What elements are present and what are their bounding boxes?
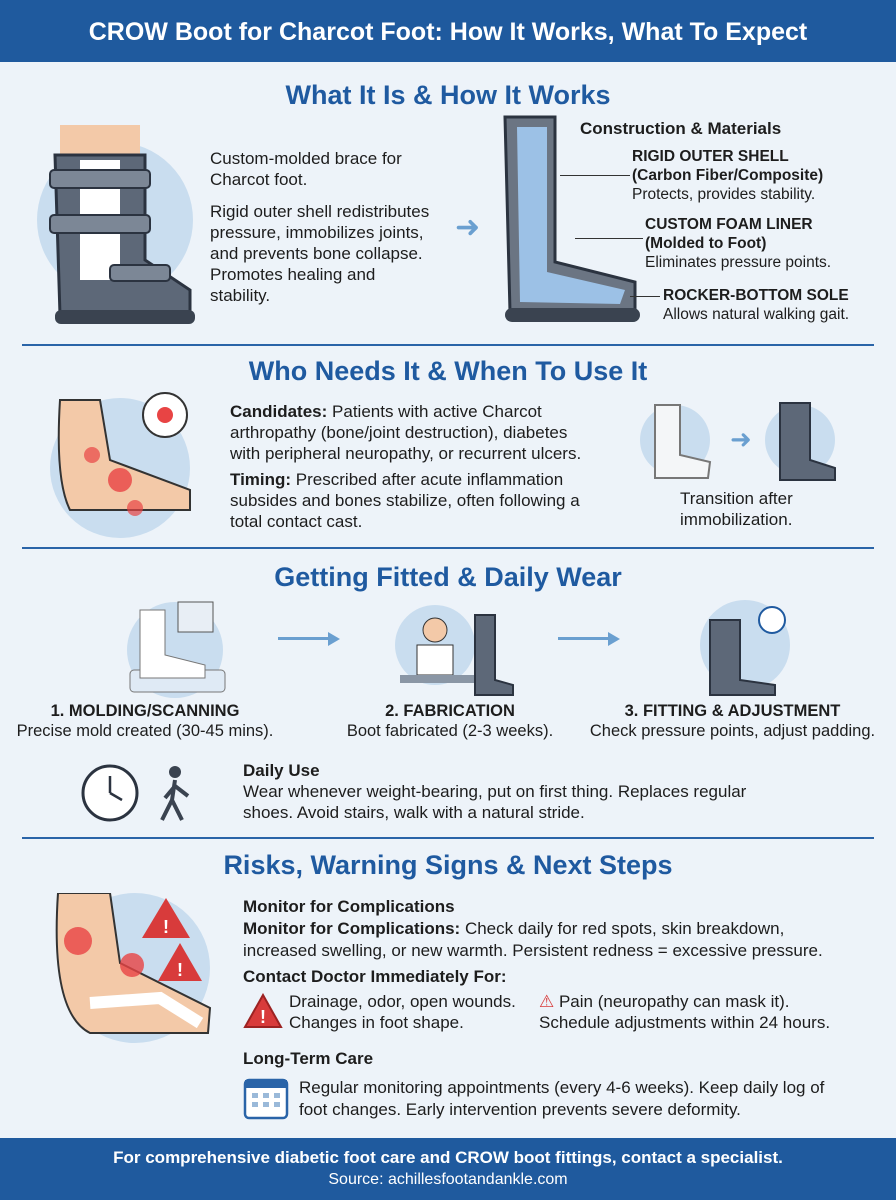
- header bar: CROW Boot for Charcot Foot: How It Works, What To Expect: [89, 18, 807, 46]
- text: Drainage, odor, open wounds. Changes in foot shape.: [289, 992, 516, 1032]
- text: ⚠ Pain (neuropathy can mask it). Schedule adjustments within 24 hours.: [539, 992, 830, 1032]
- section heading: who needs it: Who Needs It & When To Use It: [249, 356, 647, 386]
- footer bar: For comprehensive diabetic foot care and CROW boot fittings, contact a specialist.: [113, 1148, 783, 1167]
- text: (Molded to Foot): [645, 235, 766, 252]
- icon: warning: [243, 993, 283, 1028]
- construction labels: Construction & Materials: [580, 119, 781, 138]
- text: description: Custom-molded brace for Charcot foot. Rigid outer shell redistributes pressure, immobilizes joints, and prevents bone collapse. Promotes healing and stability.: [210, 149, 429, 305]
- text: long-term care: Long-Term Care: [243, 1049, 373, 1068]
- step 1 molding: [17, 602, 273, 740]
- arrow: [278, 632, 340, 646]
- boot diagram: [503, 116, 640, 322]
- text: ROCKER-BOTTOM SOLE: [663, 287, 849, 304]
- section heading: getting fitted: Getting Fitted & Daily Wear: [274, 562, 622, 592]
- footer bar: [0, 1138, 896, 1200]
- text: daily use: [243, 761, 746, 822]
- text: Protects, provides stability.: [632, 186, 815, 203]
- text: CUSTOM FOAM LINER: [645, 216, 813, 233]
- text: Allows natural walking gait.: [663, 306, 849, 323]
- step 1 molding: Precise mold created (30-45 mins).: [17, 722, 273, 740]
- icon: foot with warnings: !: [177, 960, 183, 980]
- icon: foot with warnings: !: [163, 917, 169, 937]
- section heading: what it is: What It Is & How It Works: [285, 80, 610, 110]
- text: daily use: Wear whenever weight-bearing, put on first thing. Replaces regular shoes. Avoid stairs, walk with a natural stride.: [243, 782, 746, 822]
- icon: warning: !: [260, 1007, 266, 1027]
- text: monitor: Monitor for Complications: Check daily for red spots, skin breakdown, increased swelling, or new warmth. Persistent redness = excessive pressure.: [243, 919, 823, 960]
- text: contact doctor: Contact Doctor Immediately For:: [243, 967, 507, 986]
- icon: cast to boot transition: ➜: [730, 424, 752, 454]
- step 2 fabrication: 2. FABRICATION: [385, 702, 515, 720]
- step 3 fitting: 3. FITTING & ADJUSTMENT: [625, 702, 840, 720]
- text: monitor: [243, 897, 823, 960]
- footer bar: Source: achillesfootandankle.com: [328, 1171, 568, 1188]
- icon: inflamed foot: [50, 392, 191, 538]
- text: candidates and timing: Candidates: Patients with active Charcot arthropathy (bone/joint destruction), diabetes with peripheral neuropathy, or recurrent ulcers. Timing: Prescribed after acute inflammation subsides and bones stabilize, often following a total contact cast.: [230, 402, 581, 531]
- icon: calendar: [244, 1078, 288, 1120]
- step 3 fitting: [590, 600, 875, 740]
- text: (Carbon Fiber/Composite): [632, 167, 823, 184]
- caption: transition: Transition after immobilization.: [680, 489, 793, 529]
- text: RIGID OUTER SHELL: [632, 148, 789, 165]
- section heading: risks: Risks, Warning Signs & Next Steps: [223, 850, 673, 880]
- arrow: [558, 632, 620, 646]
- icon: foot with warnings: [56, 893, 211, 1043]
- text: Eliminates pressure points.: [645, 254, 831, 271]
- step 2 fabrication: Boot fabricated (2-3 weeks).: [347, 722, 553, 740]
- icon: clock and walker: [82, 764, 190, 822]
- step 3 fitting: Check pressure points, adjust padding.: [590, 722, 875, 740]
- step 2 fabrication: [347, 605, 553, 740]
- icon: cast to boot transition: [640, 402, 836, 481]
- arrow: ➜: [455, 211, 480, 244]
- text: daily use: Daily Use: [243, 761, 320, 780]
- step 1 molding: 1. MOLDING/SCANNING: [51, 702, 239, 720]
- text: Regular monitoring appointments (every 4-6 weeks). Keep daily log of foot changes. Early intervention prevents severe deformity.: [299, 1078, 824, 1119]
- header bar: [0, 0, 896, 62]
- text: monitor: Monitor for Complications: [243, 897, 455, 916]
- icon: boot illustration: [37, 125, 195, 324]
